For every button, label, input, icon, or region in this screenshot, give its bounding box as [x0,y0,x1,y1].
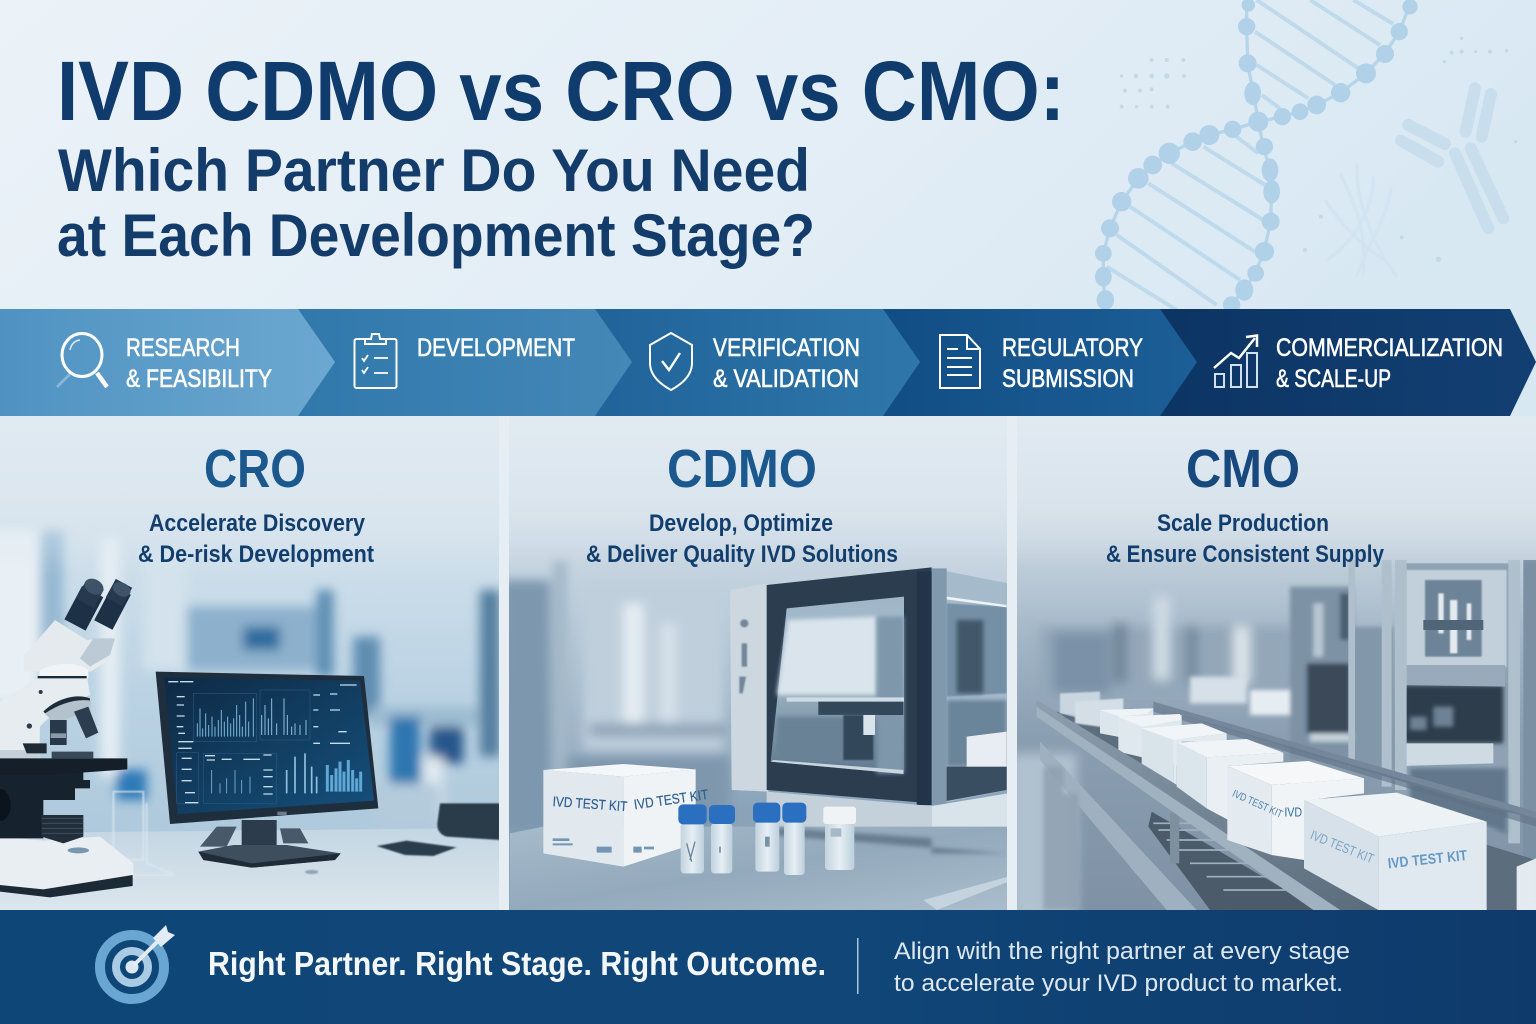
panel: CMO [1010,416,1536,920]
footer message [894,938,1350,997]
chevron: verification [560,309,920,416]
panel: CRO [0,416,500,910]
stage label: research: RESEARCH [126,334,240,362]
icon: clipboard [354,334,396,388]
icon: shield [650,333,692,390]
stage chevron band [0,309,1536,416]
box 1: IVD TEST KIT [1387,847,1468,872]
vial 1 [678,804,707,873]
IVD kit box [543,764,709,867]
header background [0,0,1536,416]
CDMO tagline: Develop, Optimize [649,510,833,537]
box 1 [1304,793,1487,910]
monitor screen [164,677,374,814]
microscope pillar [0,770,90,838]
panel: CDMO [500,416,1008,910]
stage label: development: DEVELOPMENT [417,334,575,362]
CMO heading: CMO [1186,439,1300,499]
icon: glassware [113,792,175,875]
microscope arm [0,678,90,760]
box 1 labels: IVD TEST KIT [1308,827,1377,867]
panel dividers [499,416,1017,910]
machine frames [1348,560,1536,860]
top fog [40,518,69,564]
machine column [730,583,768,792]
CDMO tagline [586,510,898,568]
chevron: development [260,309,632,416]
machine side glass [932,568,1008,805]
vial 4 [782,803,806,875]
stage label: commercialization: & SCALE-UP [1276,365,1391,393]
microscope [0,575,133,897]
monitor [156,672,378,868]
box 2: IVD [1284,805,1302,820]
front conveyor rail [1037,700,1383,910]
stage label: research: & FEASIBILITY [126,365,272,393]
CMO tagline [1106,510,1385,568]
decorative dot grids [1120,37,1517,262]
icon: antibody [1401,88,1503,228]
box top [543,764,696,777]
blurred cleanroom background [500,560,1008,910]
far boxes [1060,692,1227,787]
CRO tagline: & De-risk Development [138,541,374,568]
CMO tagline: & Ensure Consistent Supply [1106,541,1385,568]
lab bench desk [0,828,499,910]
box front [543,770,623,867]
decorative science illustrations [1095,0,1517,314]
machine frame [767,567,932,803]
panel labels [138,439,1385,568]
blurred lab background [0,530,500,827]
box 2 [1227,761,1364,860]
stage label: regulatory: REGULATORY [1002,334,1143,362]
blurred dark device [305,803,500,874]
blurred factory background [1010,597,1293,920]
stage label: verification: & VALIDATION [713,365,859,393]
footer banner [0,910,1536,1024]
box side [623,769,696,867]
machine interior [818,700,903,715]
CDMO heading: CDMO [667,439,817,499]
vial 2 [709,805,735,873]
icon: faint molecule splash [1326,164,1392,264]
subtitle line 1: Which Partner Do You Need [58,137,810,204]
production line scene [1010,560,1536,920]
CRO tagline: Accelerate Discovery [149,510,366,537]
stage label: regulatory: SUBMISSION [1002,365,1134,393]
box label left: IVD TEST KIT [552,793,628,814]
subtitle line 2: at Each Development Stage? [57,202,815,269]
icon: DNA helix [1095,0,1418,314]
back conveyor rail [1153,702,1536,818]
microscope base [0,837,133,892]
icon: growth chart [1214,336,1257,387]
icon: document [940,335,980,388]
CMO tagline: Scale Production [1157,510,1329,537]
monitor logo [277,812,287,815]
box 3 [1177,739,1283,820]
stage label: verification [713,334,860,393]
microscope stage [0,758,128,772]
monitor stand [242,820,277,845]
chevron: research [0,309,335,416]
top fog [1017,416,1536,566]
CRO heading: CRO [204,439,306,499]
footer slogan: Right Partner. Right Stage. Right Outcome. [208,945,826,982]
icon: target with arrow [100,925,175,999]
eyepieces [103,590,122,625]
footer divider [857,938,858,994]
stage label: commercialization [1276,334,1503,393]
monitor frame [156,672,378,824]
conveyor underside [1040,707,1536,910]
CRO tagline [138,510,374,568]
box 2 labels: IVD TEST KIT [1230,788,1284,821]
machine base [766,792,932,827]
top fog [509,416,1007,566]
stage label: commercialization: COMMERCIALIZATION [1276,334,1503,362]
stage label: verification: VERIFICATION [713,334,860,362]
microscope head [36,620,104,672]
machine window [771,597,904,774]
objectives [43,696,90,722]
box label right: IVD TEST KIT [633,786,709,813]
footer message: Align with the right partner at every stage [894,938,1350,965]
reagent vials [678,803,856,875]
vial 5 white [823,807,856,870]
stage label: regulatory [1002,334,1143,393]
next box edge [1517,858,1536,910]
CDMO tagline: & Deliver Quality IVD Solutions [586,541,898,568]
footer message: to accelerate your IVD product to market. [894,970,1343,997]
dashboard charts [168,682,361,803]
chevron: regulatory [860,309,1197,416]
vial 3 [753,803,780,872]
stage label: research [126,334,272,393]
steel table [510,827,1008,910]
title [57,44,1065,269]
focus knob [42,815,83,843]
chevron: commercialization [1100,309,1536,416]
main heading: IVD CDMO vs CRO vs CMO: [57,44,1065,138]
icon: magnifier [57,334,107,387]
